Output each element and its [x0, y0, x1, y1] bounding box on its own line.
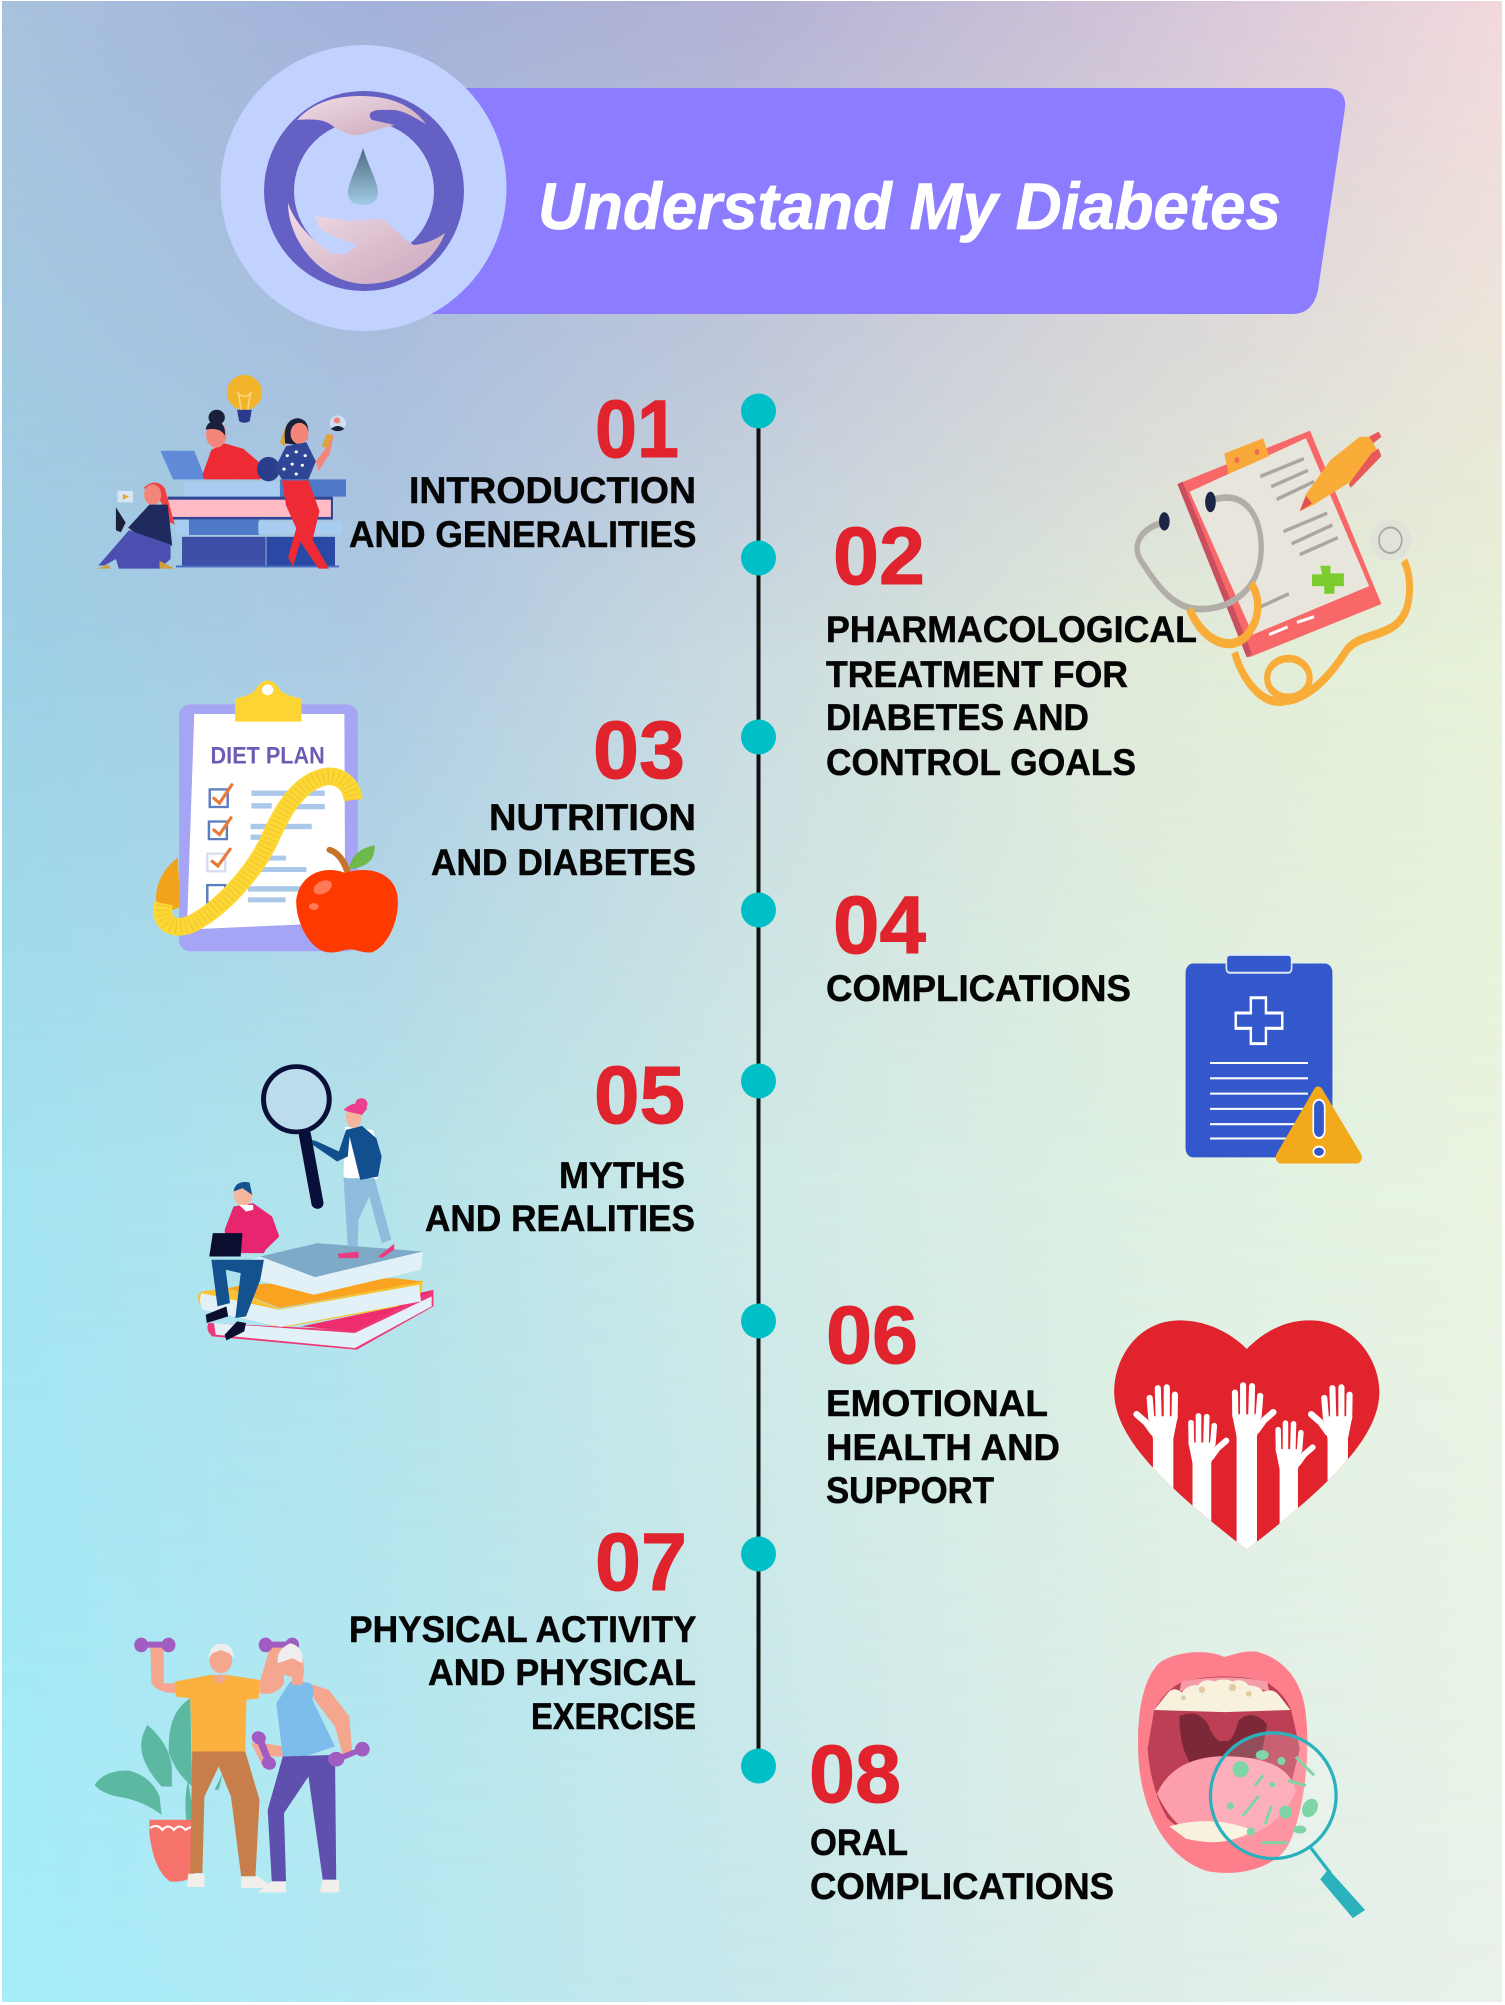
- section 02 text: 02: [833, 511, 925, 602]
- section 08 text: COMPLICATIONS: [810, 1866, 1114, 1907]
- section 07 text: [349, 1517, 697, 1737]
- banner shape: [420, 88, 1345, 314]
- section 03 text: [431, 705, 696, 883]
- illustration: seniors exercising: [95, 1638, 370, 1892]
- section 06 text: SUPPORT: [826, 1470, 994, 1511]
- logo circle: [220, 45, 506, 331]
- illustration: magnifier and people on books: [198, 1067, 433, 1350]
- illustration: mouth with magnifier: [1138, 1651, 1365, 1918]
- illustration: clipboard with warning sign: [1186, 955, 1357, 1157]
- illustration: diet plan clipboard: [156, 681, 398, 953]
- section 01 text: AND GENERALITIES: [349, 514, 696, 555]
- section 04 text: [826, 880, 1131, 1009]
- section 03 text: NUTRITION: [489, 797, 696, 838]
- title banner: [220, 45, 1345, 331]
- section 03 text: 03: [593, 705, 685, 796]
- section 07 text: EXERCISE: [531, 1696, 696, 1737]
- section 01 text: INTRODUCTION: [409, 470, 696, 511]
- section 03 text: AND DIABETES: [431, 842, 696, 883]
- section 06 text: [826, 1290, 1060, 1511]
- section 05 text: AND REALITIES: [425, 1198, 695, 1239]
- section 08 text: [809, 1729, 1114, 1907]
- illustration: diet plan clipboard: DIET PLAN: [211, 742, 325, 770]
- section 02 text: DIABETES AND: [826, 697, 1089, 738]
- section 01 text: 01: [595, 384, 679, 475]
- section 08 text: ORAL: [810, 1822, 908, 1863]
- section 06 text: 06: [826, 1290, 918, 1381]
- timeline: [741, 394, 776, 1784]
- section 07 text: AND PHYSICAL: [428, 1652, 696, 1693]
- section 04 text: COMPLICATIONS: [826, 968, 1131, 1009]
- section 05 text: [425, 1050, 695, 1239]
- illustration: heart with raised hands: [1114, 1320, 1380, 1550]
- section 07 text: 07: [595, 1517, 687, 1608]
- section 05 text: 05: [594, 1050, 685, 1141]
- section 01 text: [349, 384, 696, 555]
- section 02 text: TREATMENT FOR: [826, 654, 1128, 695]
- section 08 text: 08: [809, 1729, 901, 1820]
- section 02 text: PHARMACOLOGICAL: [826, 609, 1197, 650]
- illustration: people studying on books: [96, 375, 346, 569]
- section 07 text: PHYSICAL ACTIVITY: [349, 1609, 697, 1650]
- illustration: clipboard with stethoscope: [1137, 431, 1412, 702]
- section 06 text: EMOTIONAL: [826, 1383, 1048, 1424]
- logo ring: [279, 96, 449, 284]
- section 06 text: HEALTH AND: [826, 1427, 1060, 1468]
- section 04 text: 04: [833, 880, 926, 971]
- section 02 text: [826, 511, 1197, 783]
- section 05 text: MYTHS: [559, 1155, 685, 1196]
- title: Understand My Diabetes: [538, 169, 1281, 243]
- section 02 text: CONTROL GOALS: [826, 742, 1136, 783]
